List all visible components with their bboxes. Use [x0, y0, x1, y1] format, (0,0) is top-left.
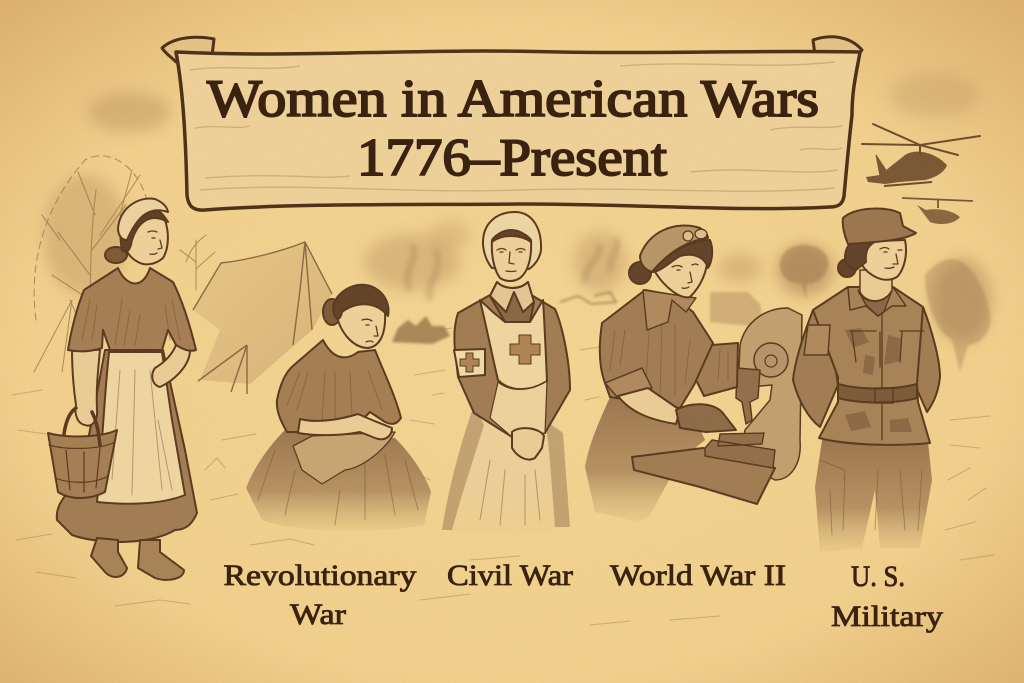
grass strokes	[12, 328, 994, 625]
machine body	[738, 308, 802, 480]
drill head	[736, 368, 760, 424]
bucket handle	[64, 408, 100, 445]
skirt strokes	[258, 450, 418, 525]
icon: helicopters	[862, 124, 980, 224]
blouse hatching	[287, 370, 382, 420]
skirt	[585, 397, 705, 522]
bare tree at left	[34, 156, 215, 372]
boots	[91, 538, 127, 577]
facial features	[880, 248, 902, 268]
face	[650, 249, 708, 297]
collar	[848, 287, 906, 316]
goggles	[683, 229, 707, 241]
banner curls	[162, 37, 862, 64]
right sleeve	[692, 312, 738, 396]
bodice and sleeves	[68, 268, 196, 351]
trouser hatching	[820, 460, 922, 535]
face	[122, 213, 168, 264]
bun	[323, 299, 341, 325]
hair	[121, 207, 168, 252]
title: Women in American Wars	[207, 70, 819, 128]
machine wheel	[754, 343, 788, 377]
skirt	[442, 395, 570, 534]
undershirt	[858, 290, 892, 316]
chest pockets	[850, 290, 924, 440]
apron bib	[480, 300, 547, 389]
apron lower panel	[490, 381, 547, 437]
bun	[105, 247, 127, 263]
headscarf	[118, 199, 168, 240]
belt	[838, 384, 917, 402]
cap	[843, 209, 916, 244]
under skirt	[57, 350, 197, 542]
shirt	[600, 290, 713, 408]
collar	[490, 282, 534, 322]
panel: title banner	[162, 37, 862, 210]
bun	[629, 262, 651, 284]
label: Civil War: Civil War	[447, 559, 573, 592]
hair band	[492, 230, 531, 242]
distant trees at right	[780, 245, 990, 372]
cap	[483, 212, 541, 269]
shirt hatching	[610, 320, 728, 400]
apron folds	[112, 370, 172, 495]
headscarf	[640, 226, 708, 272]
label: War: War	[290, 598, 346, 631]
apron	[293, 432, 395, 484]
workbench	[632, 448, 775, 504]
figure: Civil War nurse	[442, 212, 570, 534]
dress sleeves and bodice	[454, 295, 570, 437]
banner sheet	[176, 51, 860, 210]
camouflage patches	[845, 328, 912, 432]
collar	[643, 290, 696, 330]
gloved hand	[676, 404, 736, 432]
face	[492, 231, 531, 281]
apron	[97, 352, 185, 504]
facial features	[148, 231, 162, 254]
jacket	[813, 287, 930, 445]
distant truck	[710, 292, 764, 330]
trousers	[815, 440, 932, 552]
skirt folds	[480, 460, 540, 525]
left forearm and hand	[72, 348, 100, 426]
facial features	[497, 248, 525, 272]
forearms and hands	[298, 414, 392, 439]
bucket	[48, 430, 117, 498]
forearm	[618, 388, 680, 424]
neck	[860, 270, 892, 301]
skirt side shading	[442, 405, 570, 530]
face	[336, 302, 385, 348]
metal blocks	[705, 433, 775, 468]
figure: U.S. Military soldier	[793, 209, 940, 552]
figure: Revolutionary War woman	[48, 199, 197, 580]
label: Military: Military	[831, 600, 943, 633]
hair	[652, 240, 712, 272]
bodice hatching	[82, 300, 180, 345]
distant battle and fires	[392, 238, 617, 344]
subtitle dates: 1776–Present	[357, 129, 667, 187]
label: World War II: World War II	[610, 559, 786, 592]
facial features	[362, 319, 378, 342]
hair	[333, 285, 389, 319]
right forearm	[152, 345, 190, 387]
label: U. S.: U. S.	[851, 560, 905, 593]
arms	[793, 310, 838, 427]
sleeve patch	[804, 325, 830, 355]
rolled sleeve	[605, 368, 652, 398]
icon: large helicopter	[862, 124, 980, 186]
label: Revolutionary War: Revolutionary	[224, 559, 416, 592]
hair bun	[838, 259, 856, 277]
banner shading strokes	[190, 62, 842, 191]
figure: Civil War seated woman	[246, 285, 431, 531]
background scenery	[12, 73, 994, 625]
figure: World War II factory worker and machine	[585, 226, 802, 522]
armband with cross	[454, 349, 485, 377]
face	[856, 240, 906, 280]
hair	[845, 240, 878, 270]
clasped hands	[512, 428, 544, 460]
facial features	[672, 264, 698, 288]
blouse	[277, 340, 401, 432]
icon: small helicopter	[902, 198, 973, 224]
full skirt	[246, 430, 431, 531]
haze and smoke	[43, 73, 992, 342]
tent	[193, 242, 332, 394]
icon: apron cross	[510, 335, 540, 364]
